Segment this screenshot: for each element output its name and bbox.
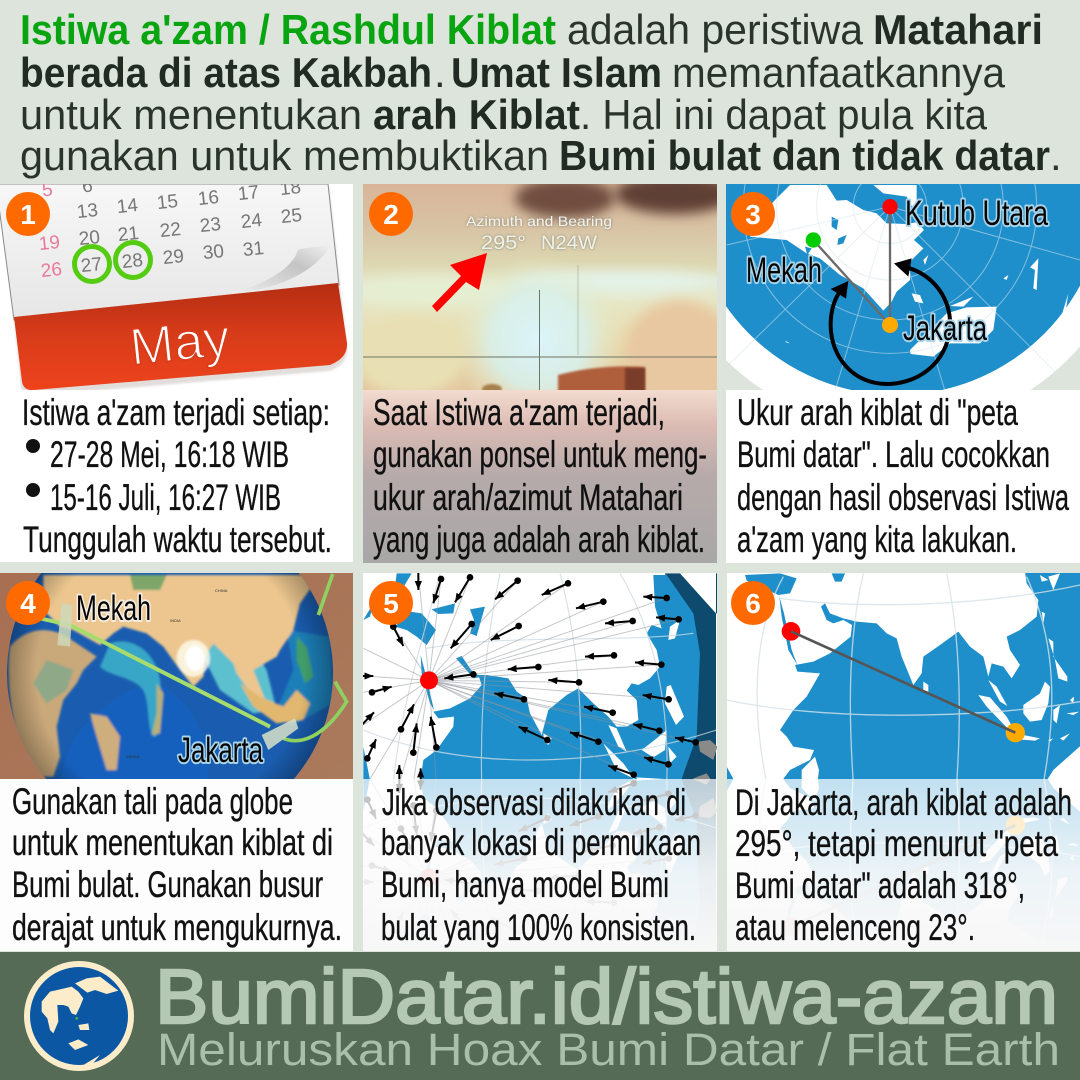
panel 4: globe photo <box>0 573 353 951</box>
heading: intro paragraph: . <box>1050 132 1062 179</box>
illustration: May calendar page <box>0 176 347 396</box>
heading: intro paragraph: adalah peristiwa <box>567 6 864 53</box>
reflection: faint map under panel 6 text <box>727 779 1080 950</box>
text: panel 4: Gunakan tali pada globe <box>12 781 293 822</box>
text: panel 1 <box>22 392 332 560</box>
badge 1 <box>6 192 50 236</box>
text: panel 4: untuk menentukan kiblat di <box>12 822 333 863</box>
heading: intro paragraph: Umat Islam <box>451 49 662 96</box>
badge 2: 2 <box>383 199 399 230</box>
text: panel 2: Saat Istiwa a'zam terjadi, <box>373 392 665 433</box>
illustration: May calendar page: 15 <box>156 191 179 214</box>
text: panel 1: Tunggulah waktu tersebut. <box>23 519 332 560</box>
badge 6: 6 <box>745 588 761 619</box>
text: panel 5 <box>381 782 701 948</box>
panel 2: sky photo <box>363 184 717 563</box>
badge 3 <box>731 192 775 236</box>
panel 6: kiblat line map <box>727 572 1080 986</box>
text: panel 1: Istiwa a'zam terjadi setiap: <box>22 392 330 433</box>
illustration: May calendar page: 21 <box>117 223 140 246</box>
illustration: May calendar page: 19 <box>38 232 61 255</box>
illustration: May calendar page: 5 <box>41 180 54 202</box>
illustration: sun and compass reading: 295° <box>481 233 526 254</box>
illustration: May calendar page: 29 <box>162 246 185 269</box>
heading: intro paragraph: arah Kiblat <box>373 91 580 138</box>
illustration: May calendar page: 26 <box>40 259 63 282</box>
illustration: globe with string: Jakarta <box>178 731 263 770</box>
heading: intro paragraph: . Hal ini dapat pula kita <box>580 91 988 138</box>
text: site URL: BumiDatar.id/istiwa-azam <box>155 954 1058 1040</box>
map: Mecca to Jakarta <box>727 572 1080 783</box>
badge 5: 5 <box>383 588 399 619</box>
text: tagline: Meluruskan Hoax Bumi Datar / Flat Earth <box>157 1024 1060 1075</box>
illustration: May calendar page: 18 <box>279 177 302 200</box>
reflection: faint map under panel 5 text <box>363 779 717 950</box>
badge 2 <box>369 192 413 236</box>
illustration: May calendar page: 25 <box>280 205 303 228</box>
illustration: May calendar page: 13 <box>76 200 99 223</box>
text: panel 5: bulat yang 100% konsisten. <box>381 907 696 948</box>
illustration: May calendar page: 30 <box>202 241 225 264</box>
text: panel 6: atau melenceng 23°. <box>735 907 975 948</box>
panel 1: calendar <box>0 176 353 562</box>
illustration: May calendar page: 28 <box>121 250 144 273</box>
heading: intro paragraph: memanfaatkannya <box>672 49 1006 96</box>
heading: intro paragraph: gunakan untuk membuktikan <box>20 132 549 179</box>
map: globe arrows <box>362 570 723 783</box>
illustration: sun and compass reading: Azimuth and Bearing <box>466 213 612 229</box>
heading: intro paragraph: Matahari <box>873 6 1043 53</box>
illustration: May calendar page: 24 <box>240 210 263 233</box>
illustration: May calendar page: 31 <box>242 238 265 261</box>
illustration: May calendar page: 27 <box>80 254 103 277</box>
badge 4: 4 <box>20 588 36 619</box>
panel 3: flat earth map <box>726 184 1080 563</box>
badge 4 <box>6 581 50 625</box>
badge 6 <box>731 581 775 625</box>
illustration: sun and compass reading <box>363 184 717 390</box>
heading: intro paragraph <box>20 6 1062 179</box>
illustration: sun and compass reading: N24W <box>541 233 597 254</box>
footer <box>0 952 1080 1080</box>
panel 5: globe map with arrows <box>363 573 717 951</box>
text: panel 2: yang juga adalah arah kiblat. <box>373 519 705 560</box>
arrow: points to azimuth reading <box>432 253 487 312</box>
text: panel 4 <box>12 781 342 948</box>
map: polar projection: Mekah <box>746 251 822 290</box>
text: panel 2: ukur arah/azimut Matahari <box>373 477 683 518</box>
illustration: May calendar page: 23 <box>199 214 222 237</box>
badge 5 <box>369 581 413 625</box>
text: panel 2: gunakan ponsel untuk meng- <box>373 434 707 475</box>
heading: intro paragraph: berada di atas Kakbah <box>20 49 432 96</box>
heading: intro paragraph: untuk menentukan <box>20 91 362 138</box>
illustration: globe with string: INDIAN <box>126 754 140 759</box>
illustration: May calendar page: 20 <box>78 227 101 250</box>
text: panel 5: Bumi, hanya model Bumi <box>381 864 669 905</box>
icon: globe logo <box>24 961 134 1071</box>
illustration: globe with string: INDIA <box>170 618 181 623</box>
illustration: May calendar page: 6 <box>81 176 94 198</box>
text: panel 6 <box>735 782 1072 948</box>
heading: intro paragraph: . <box>434 49 446 96</box>
illustration: May calendar page: 22 <box>159 219 182 242</box>
text: panel 4: derajat untuk mengukurnya. <box>12 907 342 948</box>
text: panel 2 <box>373 392 707 560</box>
text: panel 1: 15-16 Juli, 16:27 WIB <box>50 477 281 518</box>
text: panel 5: banyak lokasi di permukaan <box>381 822 701 863</box>
illustration: May calendar page: 14 <box>116 195 139 218</box>
map: polar projection: Jakarta <box>903 309 987 348</box>
text: panel 1: 27-28 Mei, 16:18 WIB <box>50 434 289 475</box>
text: panel 4: Bumi bulat. Gunakan busur <box>12 864 323 905</box>
badge 3: 3 <box>745 199 761 230</box>
heading: intro paragraph: Istiwa a'zam / Rashdul Kiblat <box>20 6 556 53</box>
illustration: globe with string: CHINA <box>215 588 228 593</box>
heading: intro paragraph: Bumi bulat dan tidak datar <box>559 132 1050 179</box>
illustration: May calendar page: 16 <box>197 187 220 210</box>
text: panel 5: Jika observasi dilakukan di <box>382 782 686 823</box>
illustration: May calendar page: May <box>127 309 233 377</box>
map: polar projection <box>726 184 1080 390</box>
illustration: May calendar page: 17 <box>237 182 260 205</box>
illustration: globe with string <box>0 573 353 779</box>
text: panel 3 <box>737 392 1069 560</box>
illustration: globe with string: Mekah <box>76 589 151 628</box>
arrow: circular azimuth arc <box>831 267 950 384</box>
badge 1: 1 <box>20 199 36 230</box>
